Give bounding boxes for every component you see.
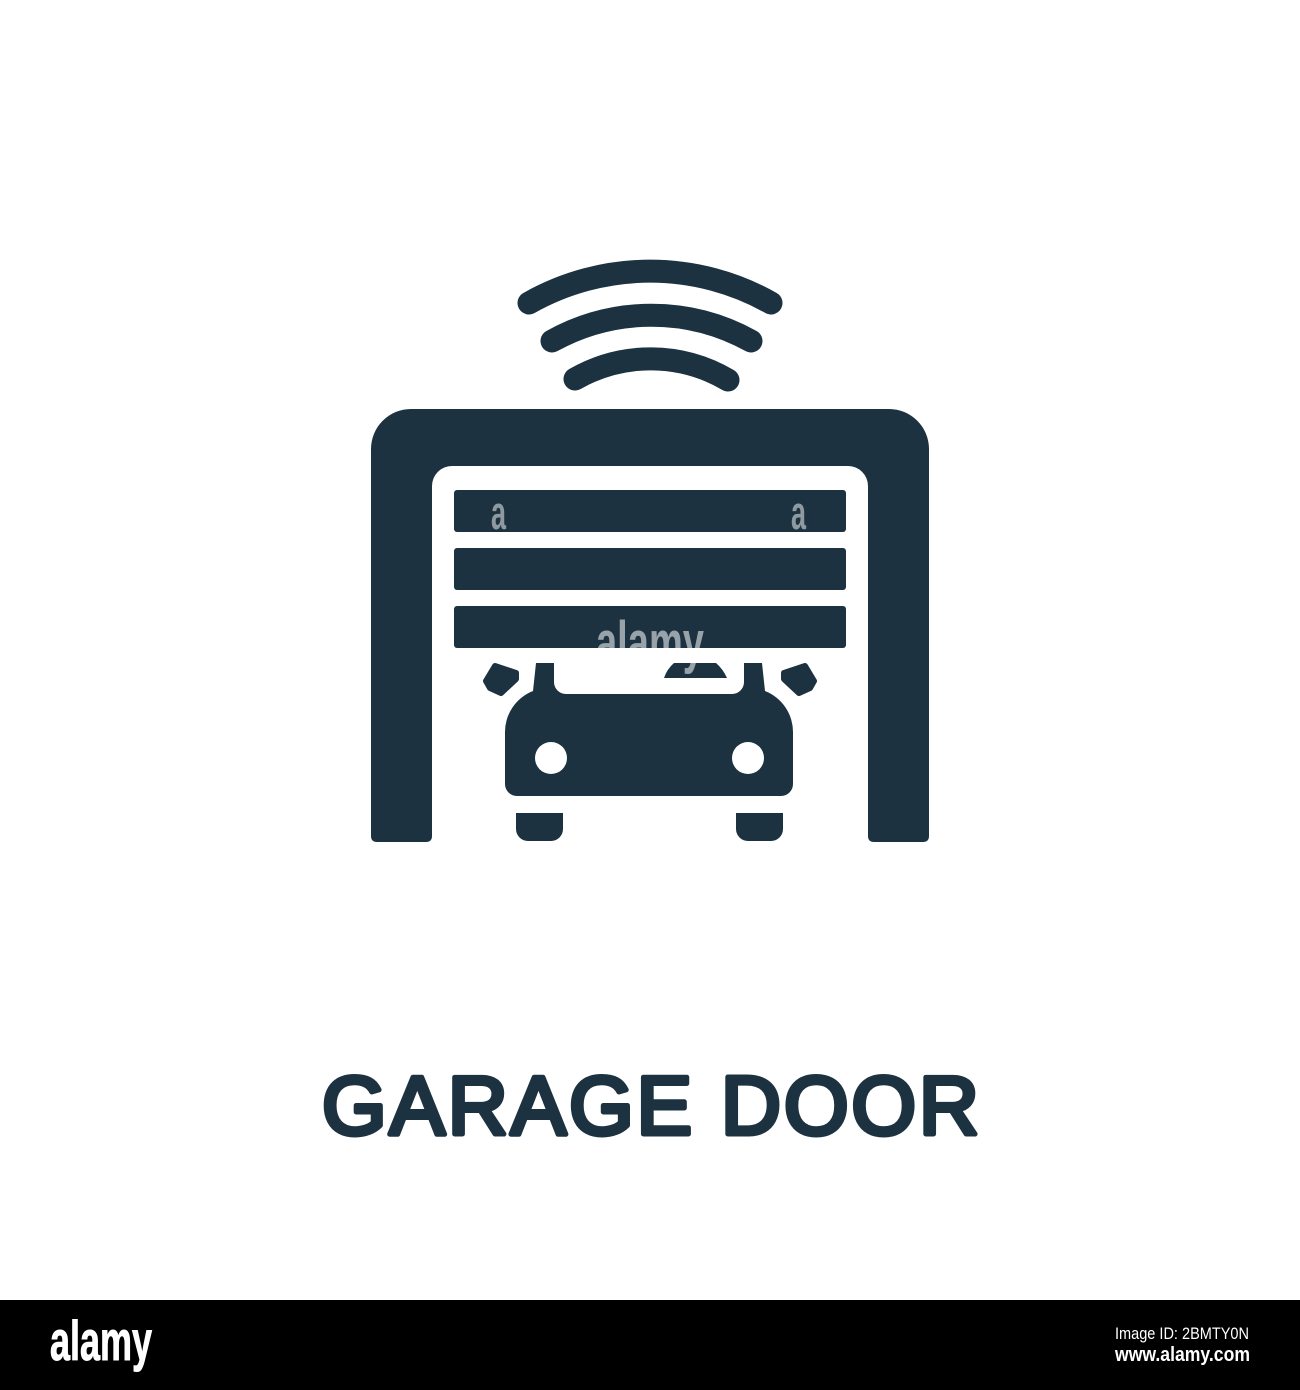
car body	[505, 663, 793, 796]
watermark: letter a right: a	[791, 486, 806, 539]
website: www.alamy.com	[1114, 1344, 1250, 1366]
image id: Image ID: 2BMTY0N	[1115, 1324, 1249, 1343]
icon: wireless signal arcs	[529, 271, 771, 380]
car mirrors	[486, 666, 814, 693]
footer logo: alamy	[50, 1309, 152, 1372]
watermark: letter a left: a	[491, 486, 506, 539]
icon: car	[486, 663, 814, 841]
car wheels	[516, 813, 783, 841]
icon: garage door slats	[454, 490, 846, 648]
car windshield detail	[664, 663, 727, 678]
title: GARAGE DOOR	[322, 1059, 979, 1152]
watermark: alamy over door: alamy	[596, 610, 704, 675]
icon: garage frame	[371, 409, 929, 842]
footer bar	[0, 1300, 1300, 1390]
